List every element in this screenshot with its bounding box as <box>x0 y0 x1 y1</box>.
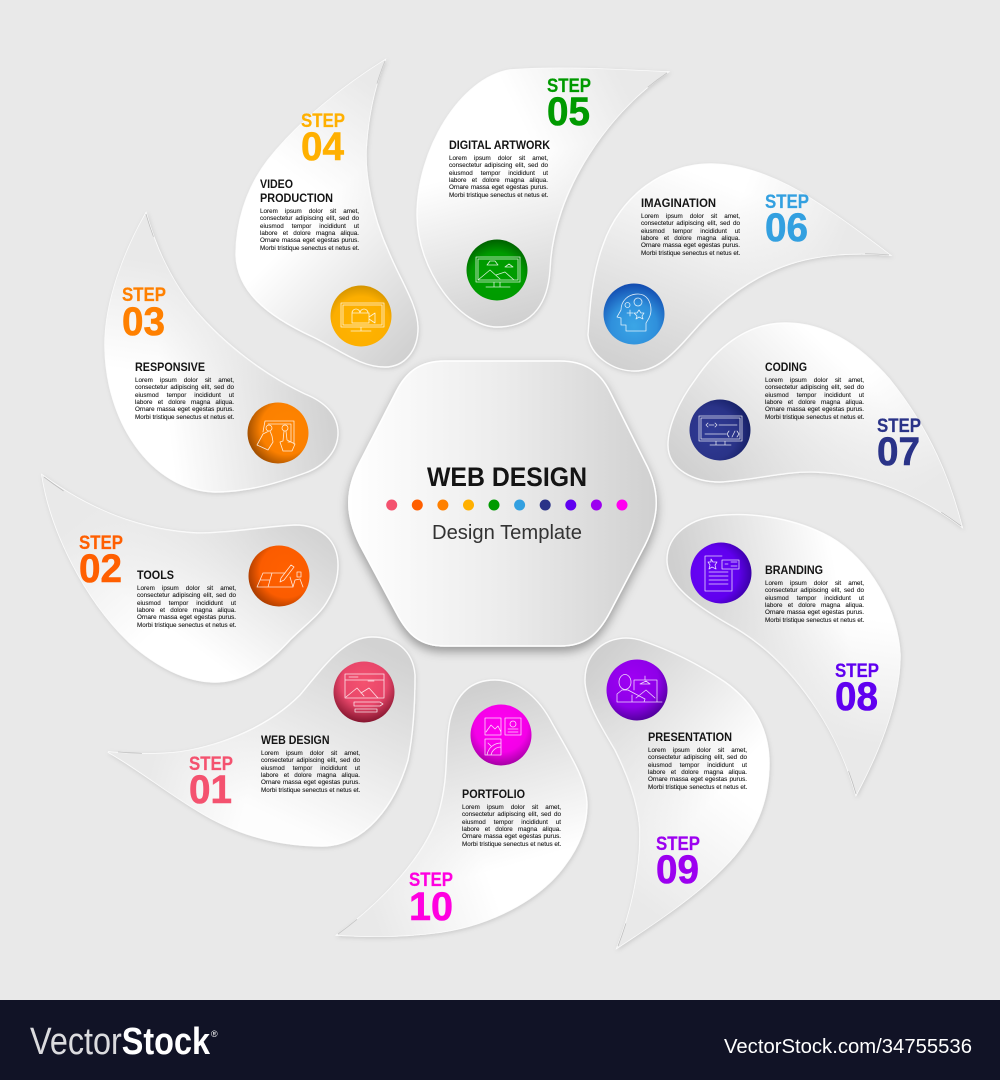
text: branding <box>765 580 864 626</box>
panel: step 01 web design <box>108 637 415 846</box>
text: web design: Ornare massa eget egestas purus. <box>261 779 360 786</box>
petal 02 <box>42 475 338 682</box>
text: presentation: consectetur adipiscing elit, sed do <box>648 754 747 761</box>
text: branding: Morbi tristique senectus et netus et. <box>765 617 864 624</box>
text: digital artwork: labore et dolore magna aliqua. <box>449 177 548 184</box>
title: WEB DESIGN <box>427 462 587 492</box>
text: web design: consectetur adipiscing elit, sed do <box>261 757 360 764</box>
panel: step 04 video production <box>236 60 418 367</box>
text: responsive: Lorem ipsum dolor sit amet, <box>135 377 234 384</box>
text: imagination: Morbi tristique senectus et netus et. <box>641 250 740 257</box>
text: tools: Lorem ipsum dolor sit amet, <box>137 585 236 592</box>
step label 10: 10 <box>409 885 453 929</box>
step label 05: STEP <box>547 76 591 97</box>
step label 10: STEP <box>409 870 453 891</box>
step label 06: 06 <box>765 206 808 250</box>
image id: VectorStock.com/34755536 <box>724 1036 972 1058</box>
heading: branding: BRANDING <box>765 563 823 577</box>
text: digital artwork: eiusmod tempor incididunt ut <box>449 170 548 177</box>
icon: web page and pencils <box>334 662 394 722</box>
text: video production: labore et dolore magna aliqua. <box>260 230 359 237</box>
icon: presenter at easel <box>606 660 668 720</box>
text: portfolio <box>462 804 561 850</box>
petal 03 <box>105 213 338 492</box>
text: video production: eiusmod tempor incididunt ut <box>260 223 359 230</box>
petal 01 <box>108 637 415 846</box>
petal 07 <box>668 323 962 527</box>
step label 08: 08 <box>835 675 878 719</box>
panel: step 03 responsive <box>105 213 338 492</box>
heading: video production: PRODUCTION <box>260 191 333 205</box>
heading: tools: TOOLS <box>137 568 174 582</box>
panel: step 08 branding <box>667 515 900 795</box>
colored dots <box>386 500 628 510</box>
panel: central hexagon <box>349 361 656 646</box>
step label 03: STEP <box>122 285 166 306</box>
heading: portfolio: PORTFOLIO <box>462 787 525 801</box>
text: digital artwork: Morbi tristique senectus et netus et. <box>449 192 548 199</box>
step label 04: 04 <box>301 125 345 169</box>
text: video production: consectetur adipiscing elit, sed do <box>260 215 359 222</box>
text: branding: consectetur adipiscing elit, sed do <box>765 587 864 594</box>
text: web design: labore et dolore magna aliqua. <box>261 772 360 779</box>
text: tools: Morbi tristique senectus et netus et. <box>137 622 236 629</box>
text: coding: Lorem ipsum dolor sit amet, <box>765 377 864 384</box>
text: responsive: eiusmod tempor incididunt ut <box>135 392 234 399</box>
step label 08: STEP <box>835 661 879 682</box>
step label 07: STEP <box>877 416 921 437</box>
text: portfolio: consectetur adipiscing elit, sed do <box>462 811 561 818</box>
text: tools: labore et dolore magna aliqua. <box>137 607 236 614</box>
text: imagination: consectetur adipiscing elit, sed do <box>641 220 740 227</box>
text: web design: eiusmod tempor incididunt ut <box>261 765 360 772</box>
step label 04: STEP <box>301 111 345 132</box>
text: presentation: Lorem ipsum dolor sit amet, <box>648 747 747 754</box>
text: branding: eiusmod tempor incididunt ut <box>765 595 864 602</box>
panel: step 06 imagination <box>588 164 890 371</box>
text: web design: Lorem ipsum dolor sit amet, <box>261 750 360 757</box>
text: portfolio: labore et dolore magna aliqua. <box>462 826 561 833</box>
text: video production: Lorem ipsum dolor sit amet, <box>260 208 359 215</box>
text: tools: Ornare massa eget egestas purus. <box>137 614 236 621</box>
heading: coding: CODING <box>765 360 807 374</box>
icon: landscape on monitor <box>466 240 528 300</box>
icon: portfolio images <box>470 704 532 766</box>
text: imagination: eiusmod tempor incididunt ut <box>641 228 740 235</box>
text: web design: Morbi tristique senectus et netus et. <box>261 787 360 794</box>
text: imagination <box>641 213 740 259</box>
text: portfolio: Lorem ipsum dolor sit amet, <box>462 804 561 811</box>
step label 02: 02 <box>79 547 122 591</box>
text: presentation: Ornare massa eget egestas purus. <box>648 776 747 783</box>
petal 08 <box>667 515 900 795</box>
text: coding: consectetur adipiscing elit, sed do <box>765 384 864 391</box>
petal 04 <box>236 60 418 367</box>
text: video production: Morbi tristique senectus et netus et. <box>260 245 359 252</box>
text: coding: Ornare massa eget egestas purus. <box>765 406 864 413</box>
text: web design <box>261 750 360 796</box>
text: digital artwork: Ornare massa eget egestas purus. <box>449 184 548 191</box>
step label 01: STEP <box>189 754 233 775</box>
text: imagination: labore et dolore magna aliqua. <box>641 235 740 242</box>
panel: step 10 portfolio <box>337 680 587 936</box>
text: digital artwork: Lorem ipsum dolor sit amet, <box>449 155 548 162</box>
text: presentation: Morbi tristique senectus et netus et. <box>648 784 747 791</box>
icon: touch screen hands <box>248 402 308 464</box>
text: tools: eiusmod tempor incididunt ut <box>137 600 236 607</box>
hexagon <box>349 361 656 646</box>
panel: step 02 tools <box>42 475 338 682</box>
text: responsive: consectetur adipiscing elit, sed do <box>135 384 234 391</box>
text: coding: labore et dolore magna aliqua. <box>765 399 864 406</box>
icon: brand documents <box>690 542 752 604</box>
icon: video camera on monitor <box>330 286 392 346</box>
text: responsive: Ornare massa eget egestas purus. <box>135 406 234 413</box>
text: presentation: labore et dolore magna aliqua. <box>648 769 747 776</box>
text: digital artwork: consectetur adipiscing elit, sed do <box>449 162 548 169</box>
text: tools <box>137 585 236 631</box>
text: coding: Morbi tristique senectus et netus et. <box>765 414 864 421</box>
text: coding: eiusmod tempor incididunt ut <box>765 392 864 399</box>
text: responsive: Morbi tristique senectus et netus et. <box>135 414 234 421</box>
heading: responsive: RESPONSIVE <box>135 360 205 374</box>
text: portfolio: Morbi tristique senectus et netus et. <box>462 841 561 848</box>
step label 01: 01 <box>189 768 232 812</box>
text: branding: Ornare massa eget egestas purus. <box>765 609 864 616</box>
text: tools: consectetur adipiscing elit, sed do <box>137 592 236 599</box>
petal 10 <box>337 680 587 936</box>
footer bar <box>0 1000 1000 1080</box>
text: coding <box>765 377 864 423</box>
petal 05 <box>417 68 668 327</box>
petal 09 <box>585 638 769 948</box>
text: presentation <box>648 747 747 793</box>
step label 02: STEP <box>79 533 123 554</box>
heading: presentation: PRESENTATION <box>648 730 732 744</box>
panel: step 09 presentation <box>585 638 769 948</box>
panel: step 05 digital artwork <box>417 68 668 327</box>
text: video production: Ornare massa eget egestas purus. <box>260 237 359 244</box>
icon: code on monitor <box>690 400 750 460</box>
step label 09: 09 <box>656 848 699 892</box>
text: responsive: labore et dolore magna aliqua. <box>135 399 234 406</box>
text: digital artwork <box>449 155 548 201</box>
text: video production <box>260 208 359 254</box>
petal 06 <box>588 164 890 371</box>
icon: drawing tablet <box>248 546 310 606</box>
text: presentation: eiusmod tempor incididunt ut <box>648 762 747 769</box>
heading: imagination: IMAGINATION <box>641 196 716 210</box>
text: imagination: Lorem ipsum dolor sit amet, <box>641 213 740 220</box>
text: responsive <box>135 377 234 423</box>
step label 05: 05 <box>547 90 590 134</box>
text: imagination: Ornare massa eget egestas purus. <box>641 242 740 249</box>
step label 03: 03 <box>122 300 165 344</box>
logo: VectorStock <box>30 1021 211 1063</box>
subtitle: Design Template <box>432 522 582 544</box>
icon: head with ideas <box>604 284 664 344</box>
panel: step 07 coding <box>668 323 962 527</box>
registered mark: ® <box>211 1029 218 1039</box>
text: portfolio: eiusmod tempor incididunt ut <box>462 819 561 826</box>
heading: digital artwork: DIGITAL ARTWORK <box>449 138 550 152</box>
text: branding: labore et dolore magna aliqua. <box>765 602 864 609</box>
step label 06: STEP <box>765 192 809 213</box>
text: branding: Lorem ipsum dolor sit amet, <box>765 580 864 587</box>
step label 07: 07 <box>877 430 920 474</box>
heading: video production <box>260 177 333 205</box>
step label 09: STEP <box>656 834 700 855</box>
heading: video production: VIDEO <box>260 177 293 191</box>
heading: web design: WEB DESIGN <box>261 733 330 747</box>
text: portfolio: Ornare massa eget egestas purus. <box>462 833 561 840</box>
